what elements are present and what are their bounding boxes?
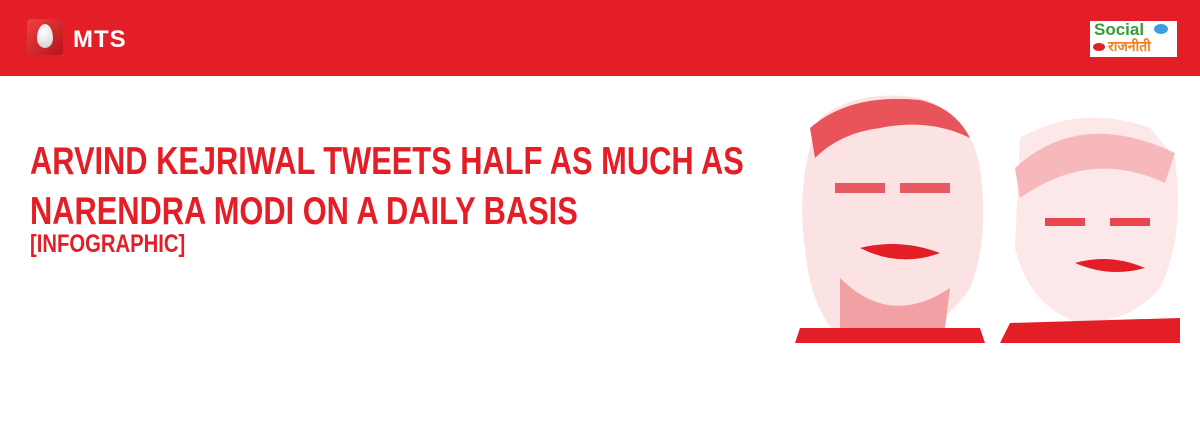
- Social Rajneeti logo: Social: [1094, 20, 1144, 39]
- subtitle: [INFOGRAPHIC]: [30, 230, 185, 258]
- Social Rajneeti logo: राजनीती: [1108, 38, 1151, 54]
- icon: MTS egg logo: [27, 19, 63, 55]
- illustration: two faces: [795, 96, 1180, 343]
- Social Rajneeti logo: [1090, 21, 1177, 57]
- title: ARVIND KEJRIWAL TWEETS HALF AS MUCH AS: [30, 140, 744, 183]
- face: Kejriwal: [1000, 118, 1180, 343]
- title: NARENDRA MODI ON A DAILY BASIS: [30, 190, 578, 233]
- header bar: [0, 0, 1200, 76]
- title: [30, 140, 744, 258]
- MTS brand text: MTS: [73, 26, 127, 53]
- face: Modi: [795, 96, 985, 343]
